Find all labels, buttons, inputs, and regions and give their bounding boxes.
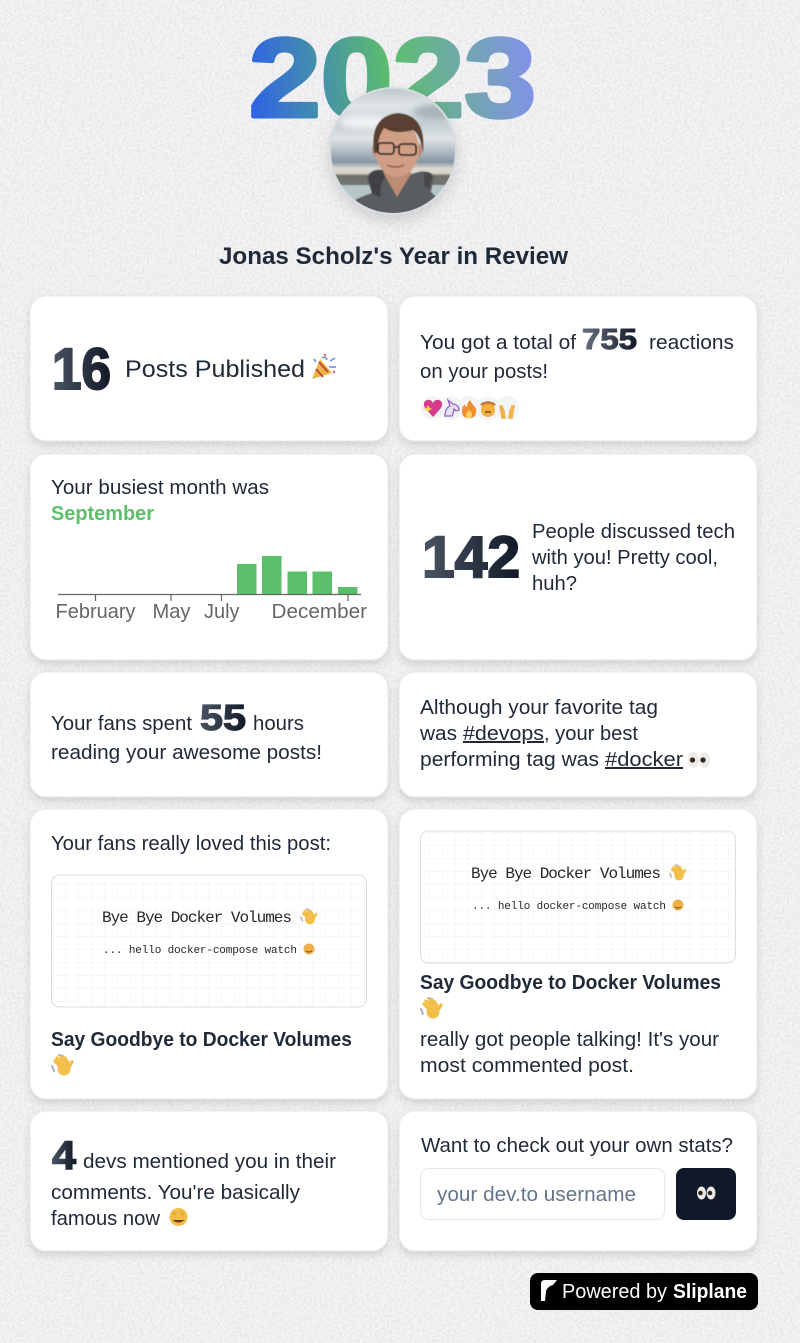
icon: waving hand	[421, 998, 441, 1018]
text: favorite tag sentence	[419, 697, 683, 771]
stat: 55: 55	[200, 697, 246, 738]
text: mentions	[51, 1151, 336, 1230]
bar chart: posts per month: February	[56, 601, 136, 623]
text: favorite tag sentence: , your best	[544, 723, 638, 745]
panel: favorite tag	[399, 672, 757, 797]
bar chart: posts per month: May	[152, 601, 190, 623]
badge: powered by Sliplane	[530, 1273, 758, 1310]
text: most commented: most commented post.	[420, 1055, 634, 1077]
panel: busiest month	[30, 454, 388, 660]
text: fans loved: Your fans really loved this post:	[51, 833, 331, 855]
avatar photo	[329, 87, 457, 216]
text: busiest month: Your busiest month was	[51, 477, 269, 499]
post title: Say Goodbye to Docker Volumes	[420, 972, 721, 994]
post cover image	[52, 875, 366, 1007]
text: total of: You got a total of	[420, 332, 576, 354]
button: eyes	[676, 1168, 736, 1220]
heading: Jonas Scholz's Year in Review	[219, 243, 568, 270]
stat: 16: 16	[52, 337, 111, 402]
text: September: September	[51, 503, 154, 525]
text: favorite tag sentence: #docker	[605, 749, 683, 771]
panel: reactions	[399, 296, 757, 441]
post cover image	[420, 831, 736, 963]
bar chart: posts per month	[56, 556, 367, 623]
text: fans spent: Your fans spent	[51, 713, 192, 735]
title: 2023 gradient year: 2023	[249, 16, 536, 140]
panel: most commented post	[399, 809, 757, 1099]
text: favorite tag sentence: was	[419, 723, 457, 745]
input: username: your dev.to username	[437, 1184, 636, 1206]
bar chart: posts per month: December	[272, 601, 367, 623]
panel: check your stats	[399, 1111, 757, 1251]
post cover image: ... hello docker-compose watch	[103, 945, 297, 957]
stat: 4: 4	[52, 1134, 77, 1178]
icon: Sliplane logo	[541, 1280, 557, 1301]
text: on your posts: on your posts!	[420, 361, 548, 383]
panel: people discussed	[399, 454, 757, 660]
icon: party popper	[312, 354, 336, 379]
bar chart: posts per month: July	[204, 601, 240, 623]
stat: 142: 142	[422, 525, 520, 590]
icon: star-struck face	[170, 1208, 188, 1226]
icon: waving hand	[52, 1055, 72, 1076]
post title: Say Goodbye to Docker Volumes	[51, 1029, 352, 1051]
text: mentions: devs mentioned you in their	[83, 1151, 336, 1173]
text: people discussed tech: huh?	[532, 573, 577, 595]
badge: powered by Sliplane: Powered by	[562, 1281, 667, 1303]
text: most commented	[420, 1029, 719, 1077]
icon: eyes	[688, 752, 710, 768]
text: mentions: famous now	[51, 1208, 161, 1230]
panel: most loved post	[30, 809, 388, 1099]
text: people discussed tech	[531, 521, 735, 595]
input: username	[420, 1168, 664, 1220]
text: favorite tag sentence: performing tag was	[420, 749, 599, 771]
text: prompt: Want to check out your own stats?	[421, 1135, 733, 1157]
badge: powered by Sliplane: Sliplane	[673, 1281, 747, 1303]
label: posts published: Posts Published	[125, 356, 305, 383]
post cover image: Bye Bye Docker Volumes	[471, 865, 661, 883]
text: favorite tag sentence: #devops	[463, 723, 544, 745]
icons: reaction emoji row	[421, 396, 519, 420]
post cover image: Bye Bye Docker Volumes	[102, 909, 292, 927]
text: people discussed tech: People discussed tech	[532, 521, 735, 543]
text: reading posts: reading your awesome posts!	[51, 742, 322, 764]
panel: reading hours	[30, 672, 388, 797]
text: mentions: comments. You're basically	[51, 1182, 300, 1204]
text: reactions: reactions	[649, 332, 734, 354]
text: hours: hours	[253, 713, 304, 735]
panel: mentions	[30, 1111, 388, 1251]
stat: 755: 755	[582, 324, 637, 356]
text: most commented: really got people talking! It's your	[420, 1029, 719, 1051]
text: people discussed tech: with you! Pretty cool,	[531, 547, 718, 569]
panel: posts published	[30, 296, 388, 441]
post cover image: ... hello docker-compose watch	[472, 901, 666, 913]
text: favorite tag sentence: Although your favorite tag	[420, 697, 658, 719]
